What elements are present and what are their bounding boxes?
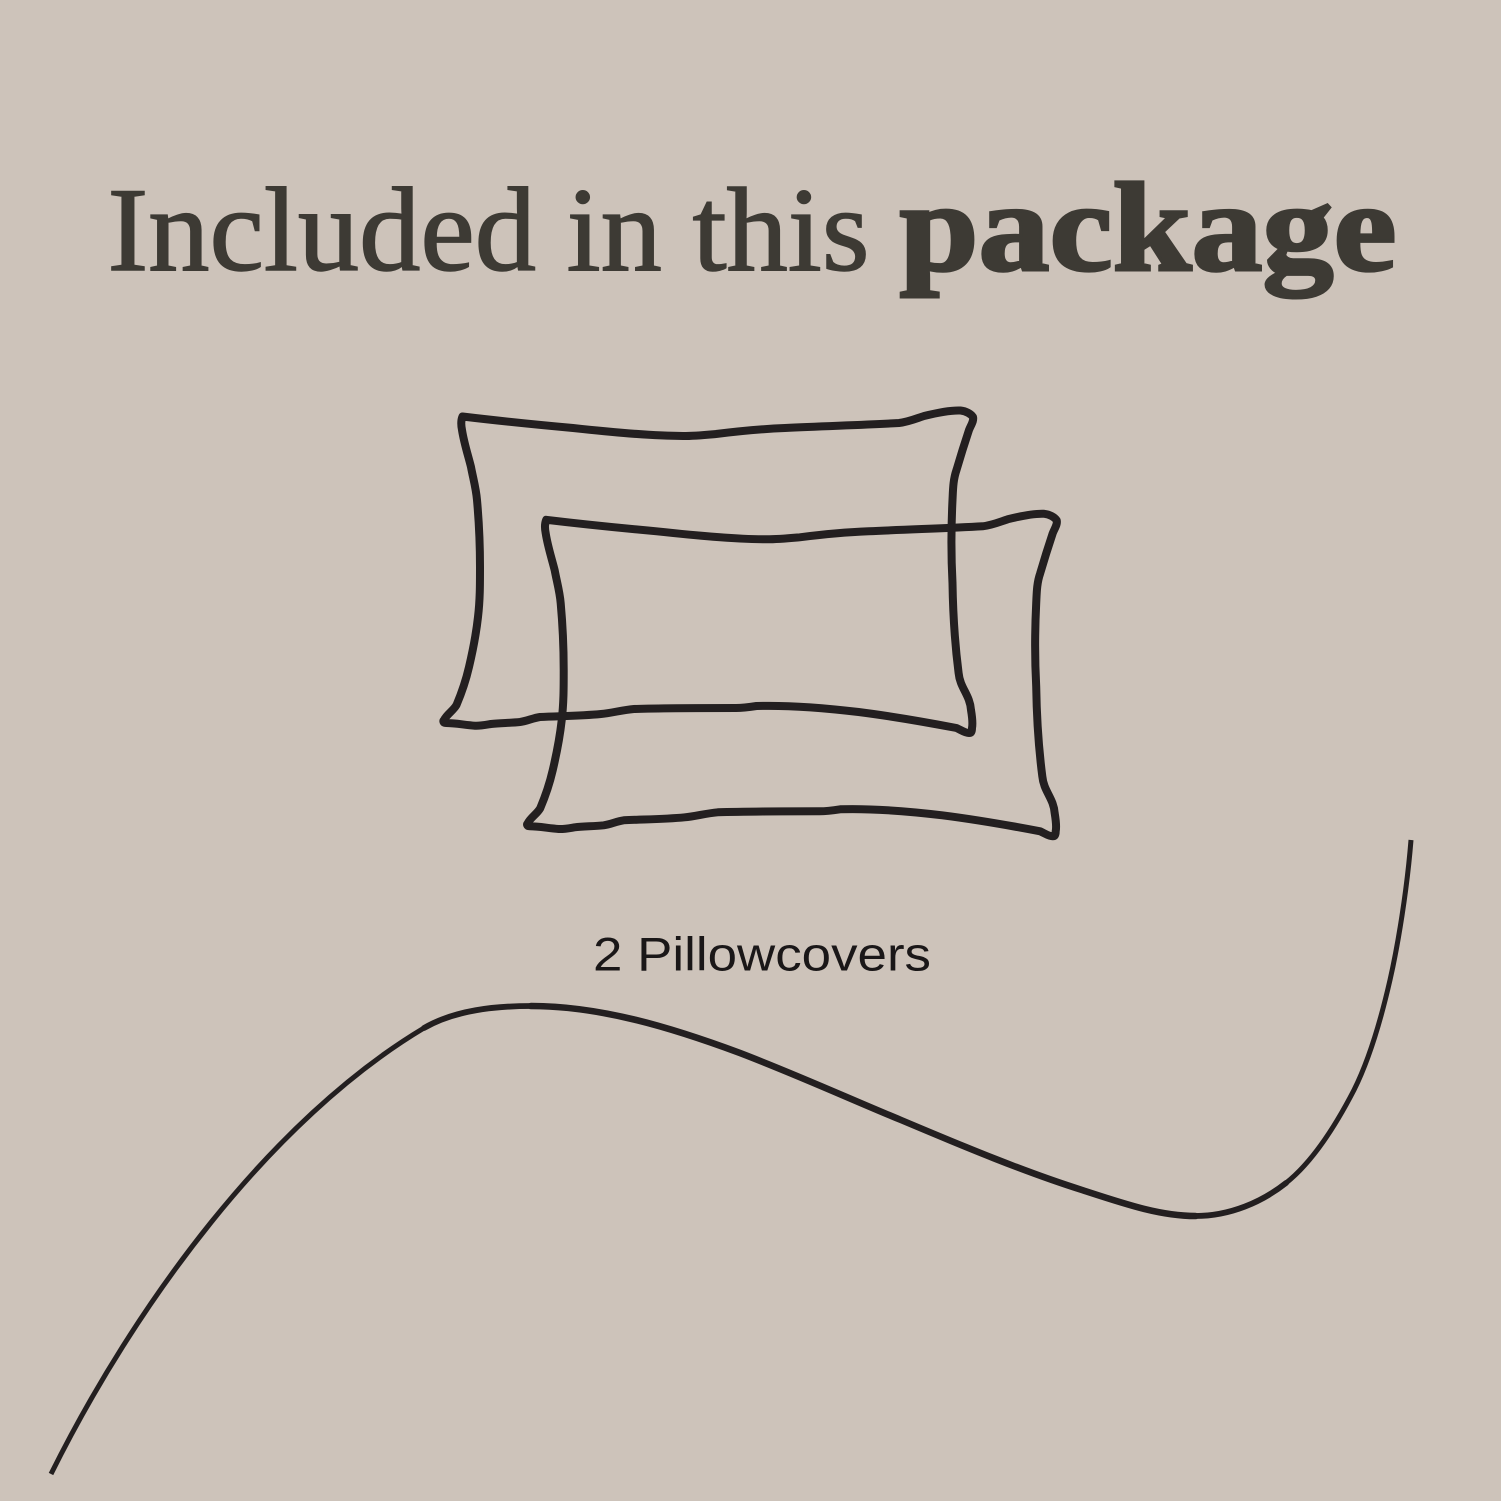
title: Included in this <box>108 163 870 296</box>
front pillow <box>527 514 1057 836</box>
icon: two pillowcovers <box>443 410 1057 836</box>
title emphasis: package: package <box>900 158 1396 298</box>
decorative curve <box>51 840 1411 1474</box>
back pillow <box>443 410 973 733</box>
caption: 2 Pillowcovers <box>593 928 931 980</box>
